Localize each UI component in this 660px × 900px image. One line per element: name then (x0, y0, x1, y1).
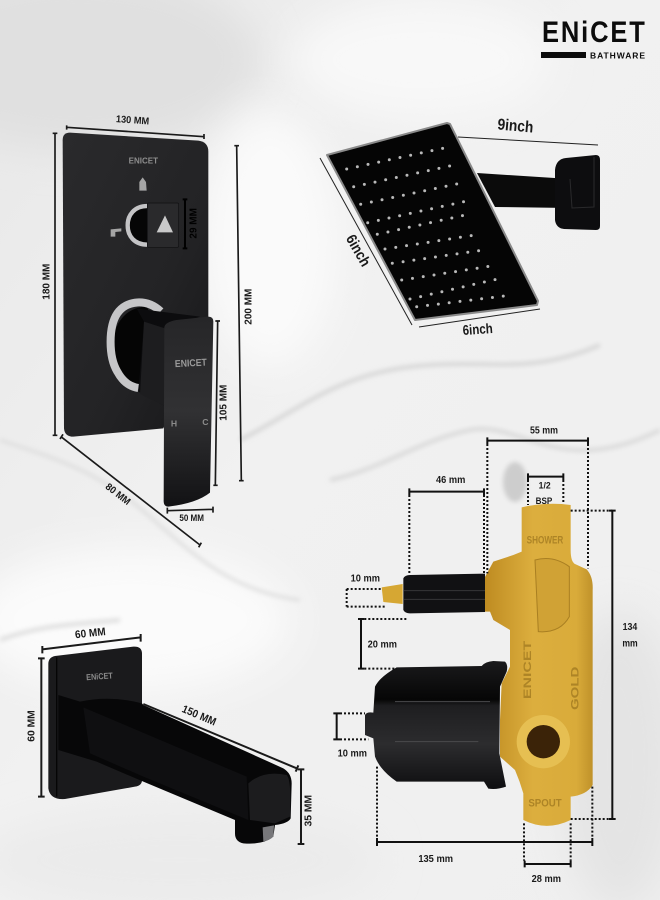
icon: triangle (157, 215, 173, 232)
black spindle (403, 574, 485, 613)
lever handle (164, 317, 213, 507)
134 label: 134 (623, 622, 638, 633)
6inch bottom dimension: 6inch (462, 320, 493, 338)
plate (63, 133, 208, 437)
200 MM dimension (234, 146, 255, 481)
28 mm label: 28 mm (532, 874, 561, 885)
BSP label: BSP (536, 496, 552, 506)
29 MM dimension: 29 MM (189, 208, 200, 239)
outlet ring (517, 715, 570, 768)
icon: tap (111, 228, 121, 237)
60 MM top dimension: 60 MM (74, 626, 106, 641)
130 MM dimension: 130 MM (115, 114, 150, 127)
150 MM dimension: 150 MM (180, 703, 218, 728)
9inch dimension (458, 116, 598, 145)
cap highlights (395, 702, 490, 742)
60 MM side dimension: 60 MM (27, 710, 38, 742)
brass body (483, 504, 593, 826)
handle recess (113, 307, 170, 388)
shower nozzles (347, 148, 513, 307)
black cartridge cap (365, 661, 507, 789)
handle ring (111, 302, 161, 388)
cast text: gold: GOLD (569, 667, 581, 710)
29 MM dimension (183, 199, 200, 249)
plate logo text: ENiCET (86, 670, 114, 682)
diverter ring (128, 206, 147, 245)
handle text: ENICET (175, 358, 207, 370)
dimension lines (333, 437, 616, 867)
panel: rain shower head with dimensions (320, 116, 600, 338)
6inch left dimension: 6inch (342, 232, 374, 270)
mm label: mm (622, 639, 638, 650)
60 MM top dimension (42, 626, 141, 653)
spout side face (83, 707, 248, 820)
cast text: shower: SHOWER (527, 534, 563, 546)
panel: diverter valve plate with dimensions (42, 114, 255, 547)
6inch bottom dimension (419, 309, 540, 338)
200 MM dimension: 200 MM (244, 289, 255, 325)
logo: ENICET Bathware: BATHWARE (590, 50, 645, 60)
shower arm (477, 173, 570, 208)
135 mm label: 135 mm (418, 854, 453, 865)
wall bracket (555, 155, 600, 230)
46 mm label: 46 mm (436, 475, 465, 486)
35 MM dimension: 35 MM (303, 795, 314, 826)
50 MM dimension: 50 MM (179, 513, 204, 523)
60 MM side dimension (27, 658, 45, 797)
logo: ENICET Bathware: ENiCET (542, 15, 645, 48)
50 MM dimension (167, 507, 213, 523)
1/2 BSP label: 1/2 (539, 480, 551, 490)
spout wall plate (48, 647, 142, 799)
80 MM dimension: 80 MM (103, 482, 132, 508)
6inch left dimension (320, 158, 412, 325)
10 mm bottom label: 10 mm (338, 748, 367, 759)
180 MM dimension: 180 MM (42, 264, 53, 300)
cold label: C (202, 417, 209, 427)
130 MM dimension (67, 114, 204, 139)
180 MM dimension (42, 133, 57, 435)
35 MM dimension (298, 769, 314, 844)
panel: concealed valve body with dimensions (333, 425, 638, 885)
150 MM dimension (143, 703, 298, 772)
105 MM dimension (213, 321, 230, 485)
105 MM dimension: 105 MM (219, 385, 230, 421)
outlet hole (527, 725, 560, 758)
diverter recess (128, 207, 147, 245)
20 mm label: 20 mm (368, 639, 397, 650)
shower plate (327, 123, 538, 320)
icon: shower head (139, 177, 147, 191)
9inch dimension: 9inch (497, 116, 534, 137)
spout outlet ring (263, 825, 274, 841)
cast text: spout: SPOUT (528, 798, 562, 810)
cast text: enicet: ENICET (522, 641, 534, 699)
diverter knob (147, 203, 179, 247)
handle neck (137, 309, 200, 406)
plate logo text: ENICET (129, 156, 159, 166)
hot label: H (171, 419, 177, 429)
spout body (58, 695, 292, 844)
spout end cap (248, 774, 290, 823)
panel: bath spout with dimensions (27, 626, 314, 844)
brass shading (535, 558, 569, 632)
55 mm label: 55 mm (530, 425, 558, 436)
brass spindle tip (382, 584, 403, 604)
80 MM dimension (60, 434, 201, 547)
10 mm top label: 10 mm (351, 573, 380, 584)
